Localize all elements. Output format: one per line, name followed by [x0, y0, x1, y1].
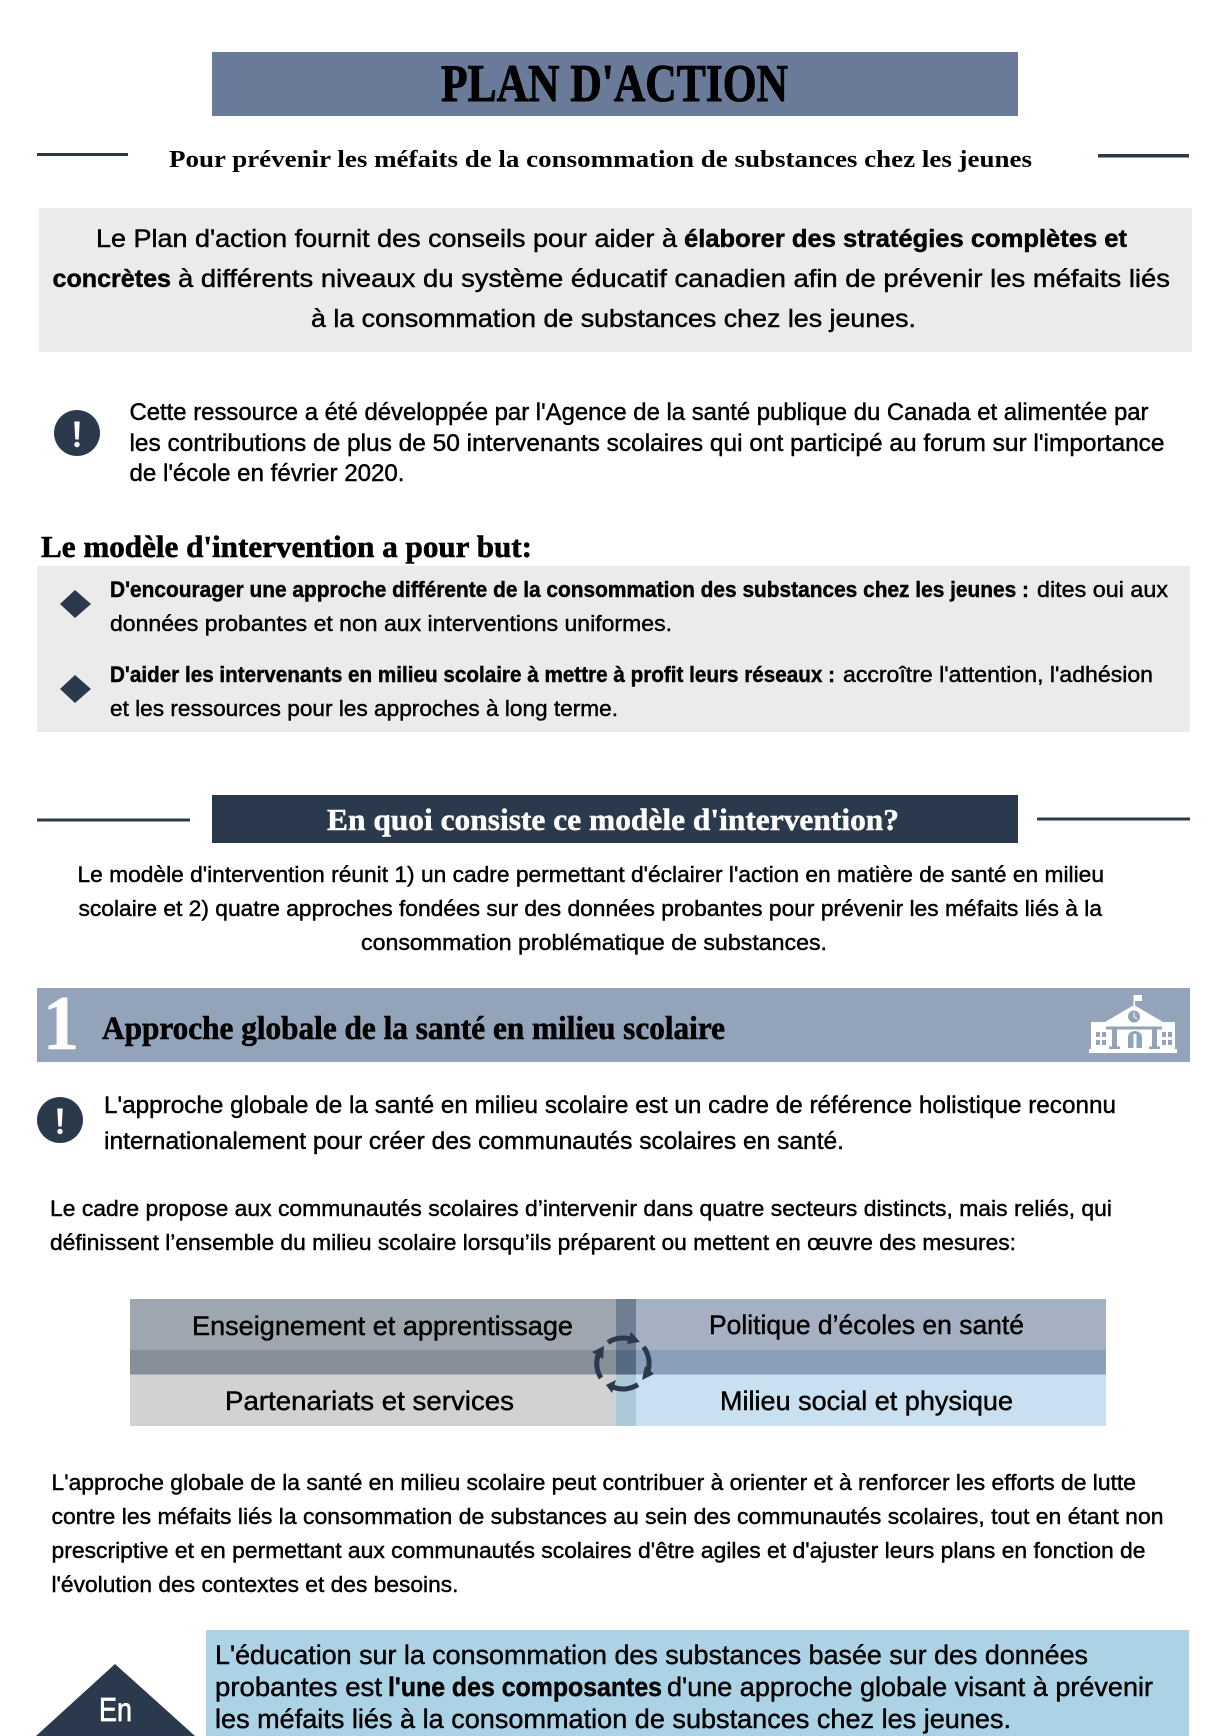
panel: introduction: à la consommation de substances chez les jeunes.	[311, 305, 916, 333]
section heading: model	[37, 795, 1190, 843]
callout: education	[206, 1630, 1189, 1736]
goal 1: dites oui aux	[1037, 577, 1169, 602]
text block: approach benefits	[52, 1470, 1164, 1597]
panel: introduction	[39, 208, 1192, 352]
goal 2: accroître l'attention, l'adhésion	[843, 662, 1153, 687]
panel: introduction: à différents niveaux du système éducatif canadien afin de prévenir les méfaits liés	[178, 265, 1170, 293]
text block: holistic framework: internationalement pour créer des communautés scolaires en santé.	[104, 1128, 844, 1155]
icon: triangle En	[36, 1664, 195, 1736]
text block: approach benefits: l'évolution des contextes et des besoins.	[52, 1572, 458, 1597]
text block: approach benefits: L'approche globale de la santé en milieu scolaire peut contribuer à orienter et à renforcer les efforts de lutte	[52, 1470, 1136, 1495]
icon: school building	[1089, 995, 1177, 1053]
text block: source: de l'école en février 2020.	[130, 460, 404, 487]
callout: education: d'une approche globale visant à prévenir	[667, 1672, 1153, 1702]
heading: Approche globale de la santé en milieu scolaire	[102, 1011, 725, 1047]
callout: education: les méfaits liés à la consommation de substances chez les jeunes.	[215, 1704, 1011, 1734]
panel: introduction: concrètes	[52, 265, 171, 293]
text block: four sectors intro	[50, 1196, 1112, 1255]
text block: holistic framework: L'approche globale de la santé en milieu scolaire est un cadre de référence holistique reconnu	[104, 1092, 1116, 1119]
text block: model description: consommation problématique de substances.	[361, 930, 827, 955]
text block: four sectors intro: définissent l’ensemble du milieu scolaire lorsqu’ils préparent ou mettent en œuvre des mesures:	[50, 1230, 1016, 1255]
section heading: model: En quoi consiste ce modèle d'intervention?	[327, 802, 899, 837]
callout: education: l'une des composantes	[388, 1672, 662, 1702]
number: 1	[43, 980, 79, 1066]
icon: diamond bullet	[60, 590, 91, 618]
panel: introduction: élaborer des stratégies complètes et	[684, 225, 1128, 253]
icon: triangle En: En	[99, 1691, 132, 1728]
icon: exclamation	[54, 410, 100, 456]
text block: source: Cette ressource a été développée par l'Agence de la santé publique du Canada et alimentée par	[130, 399, 1149, 426]
text block: model description: Le modèle d'intervention réunit 1) un cadre permettant d'éclairer l'action en matière de santé en milieu	[78, 862, 1104, 887]
text block: source	[130, 399, 1164, 487]
heading: goals: Le modèle d'intervention a pour but:	[41, 529, 532, 564]
subtitle: Pour prévenir les méfaits de la consommation de substances chez les jeunes	[169, 147, 1032, 173]
section 1 header	[37, 980, 1190, 1066]
goal 2	[110, 662, 1153, 721]
goal 2: et les ressources pour les approches à long terme.	[110, 696, 618, 721]
diagram: four sectors	[130, 1299, 1106, 1426]
panel: goals	[37, 566, 1190, 732]
text block: approach benefits: contre les méfaits liés la consommation de substances au sein des communautés scolaires, tout en étant non	[52, 1504, 1164, 1529]
goal 1	[110, 577, 1169, 636]
text block: model description	[78, 862, 1104, 955]
callout: education: L'éducation sur la consommation des substances basée sur des données	[215, 1640, 1088, 1670]
text block: source: les contributions de plus de 50 intervenants scolaires qui ont participé au forum sur l'importance	[130, 430, 1164, 457]
title: PLAN D'ACTION	[441, 55, 788, 113]
subtitle	[37, 147, 1189, 173]
sector label: Politique d’écoles en santé	[709, 1310, 1024, 1340]
goal 2: D'aider les intervenants en milieu scolaire à mettre à profit leurs réseaux :	[110, 662, 835, 687]
text block: holistic framework	[104, 1092, 1116, 1155]
text block: four sectors intro: Le cadre propose aux communautés scolaires d’intervenir dans quatre secteurs distincts, mais reliés, qui	[50, 1196, 1112, 1221]
goal 1: D'encourager une approche différente de la consommation des substances chez les jeunes :	[110, 577, 1029, 602]
icon: exclamation	[37, 1097, 83, 1143]
icon: diamond bullet	[60, 675, 91, 703]
text block: model description: scolaire et 2) quatre approches fondées sur des données probantes pour prévenir les méfaits liés à la	[78, 896, 1102, 921]
sector label: Partenariats et services	[225, 1386, 514, 1416]
sector label: Milieu social et physique	[720, 1386, 1013, 1416]
panel: introduction: Le Plan d'action fournit des conseils pour aider à	[96, 225, 677, 253]
title banner	[212, 52, 1018, 116]
icon: cycle arrows	[592, 1332, 654, 1393]
text block: approach benefits: prescriptive et en permettant aux communautés scolaires d'être agiles et d'ajuster leurs plans en fonction de	[52, 1538, 1146, 1563]
goal 1: données probantes et non aux interventions uniformes.	[110, 611, 672, 636]
callout: education: probantes est	[215, 1672, 383, 1702]
sector label: Enseignement et apprentissage	[192, 1311, 573, 1341]
